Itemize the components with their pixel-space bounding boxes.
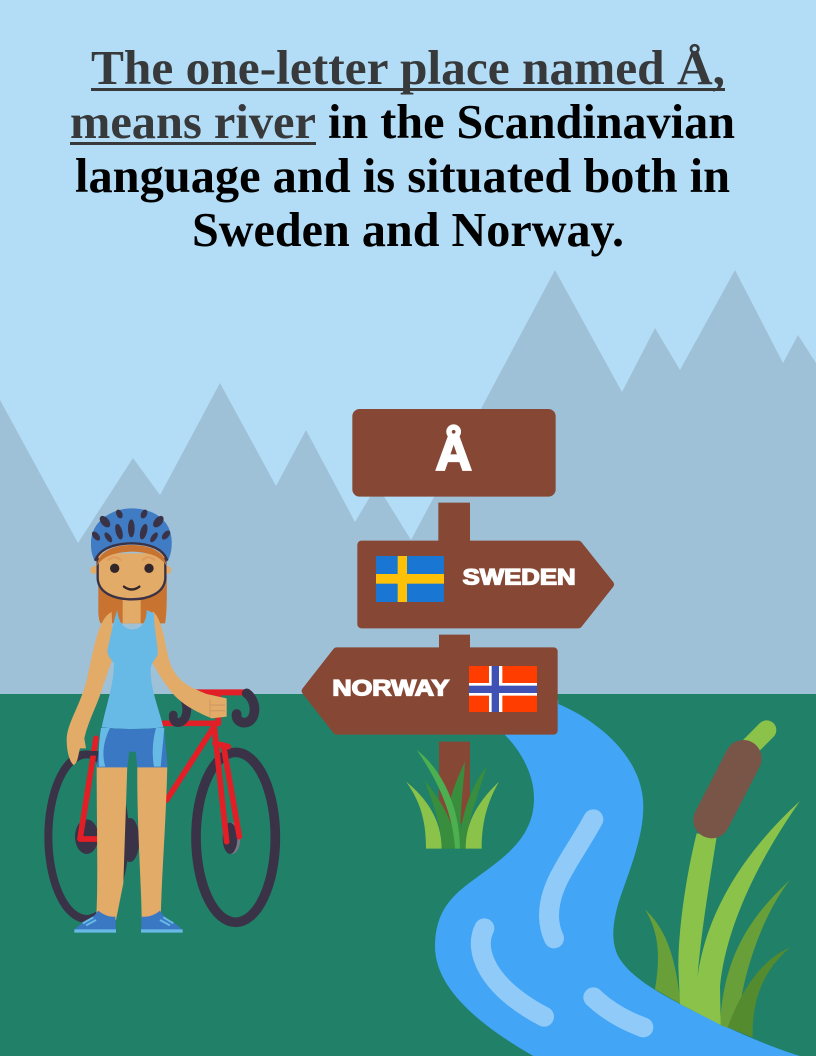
signpost bbox=[306, 409, 610, 849]
back hair bbox=[98, 573, 167, 623]
head bbox=[90, 545, 171, 599]
river bbox=[435, 700, 800, 1056]
helmet bbox=[90, 508, 172, 562]
cyclist with bicycle bbox=[48, 508, 275, 933]
sign: Sweden bbox=[361, 545, 610, 624]
icon: Swedish flag bbox=[376, 556, 444, 602]
title: The one-letter place named Å, bbox=[91, 40, 725, 95]
sign: Å: Å bbox=[436, 425, 472, 481]
title bbox=[70, 40, 735, 257]
bicycle bbox=[48, 692, 275, 922]
sign: Norway: NORWAY bbox=[332, 676, 450, 701]
sign: Å bbox=[352, 409, 556, 497]
shoes bbox=[74, 911, 183, 933]
sign: Norway bbox=[306, 651, 554, 731]
background mountains bbox=[0, 270, 816, 700]
cattail plant bbox=[645, 730, 800, 1037]
neck and arms bbox=[67, 593, 227, 765]
shorts bbox=[97, 727, 168, 767]
tank top bbox=[102, 610, 163, 729]
grass tuft bbox=[406, 750, 499, 849]
icon: Norwegian flag bbox=[469, 666, 537, 712]
legs bbox=[96, 765, 167, 920]
ground bbox=[0, 694, 816, 1056]
title: in the Scandinavian bbox=[328, 94, 735, 149]
title: Sweden and Norway. bbox=[192, 202, 624, 257]
sign: Sweden: SWEDEN bbox=[463, 564, 576, 589]
post bbox=[438, 503, 470, 823]
title: language and is situated both in bbox=[75, 148, 730, 203]
title: means river bbox=[70, 94, 316, 149]
